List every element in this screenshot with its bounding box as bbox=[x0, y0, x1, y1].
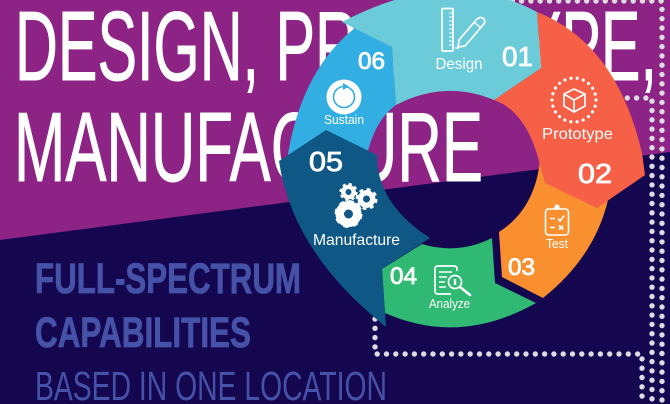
segment 04: analyze: Analyze bbox=[429, 296, 470, 311]
segment 05: manufacture: 05 bbox=[309, 146, 343, 177]
icon: clipboard bbox=[546, 204, 568, 235]
segment 03: test bbox=[499, 160, 608, 298]
segment 04: analyze bbox=[382, 238, 536, 327]
dotted border lines bbox=[375, 1, 662, 404]
segment 06: sustain: Sustain bbox=[324, 112, 364, 127]
navy diagonal background bbox=[0, 152, 670, 404]
segment 05: manufacture bbox=[279, 130, 430, 327]
segment 02: prototype: 02 bbox=[578, 158, 612, 189]
segment 03: test: Test bbox=[546, 236, 568, 251]
icon: document with magnifier bbox=[435, 266, 470, 295]
icon: ruler and pencil bbox=[442, 8, 485, 51]
process ring bbox=[279, 0, 645, 327]
segment 04: analyze: 04 bbox=[390, 263, 417, 290]
icon: gears bbox=[336, 184, 376, 226]
icon: sustain cycle bbox=[326, 80, 362, 114]
segment 01: design: 01 bbox=[502, 41, 533, 72]
subheading: full-spectrum capabilities bbox=[35, 255, 387, 404]
icon: cube in dotted circle bbox=[552, 78, 596, 122]
segment 03: test: 03 bbox=[508, 254, 535, 281]
subheading: full-spectrum capabilities: CAPABILITIES bbox=[35, 309, 251, 357]
subheading: full-spectrum capabilities: FULL-SPECTRUM bbox=[35, 255, 301, 303]
segment 02: prototype bbox=[494, 12, 645, 208]
title bbox=[14, 0, 657, 202]
segment 01: design: Design bbox=[436, 56, 482, 73]
segment 06: sustain: 06 bbox=[358, 48, 385, 75]
segment 02: prototype: Prototype bbox=[542, 126, 613, 143]
segment 01: design bbox=[342, 0, 541, 105]
segment 06: sustain bbox=[288, 28, 396, 175]
segment 05: manufacture: Manufacture bbox=[313, 232, 400, 249]
